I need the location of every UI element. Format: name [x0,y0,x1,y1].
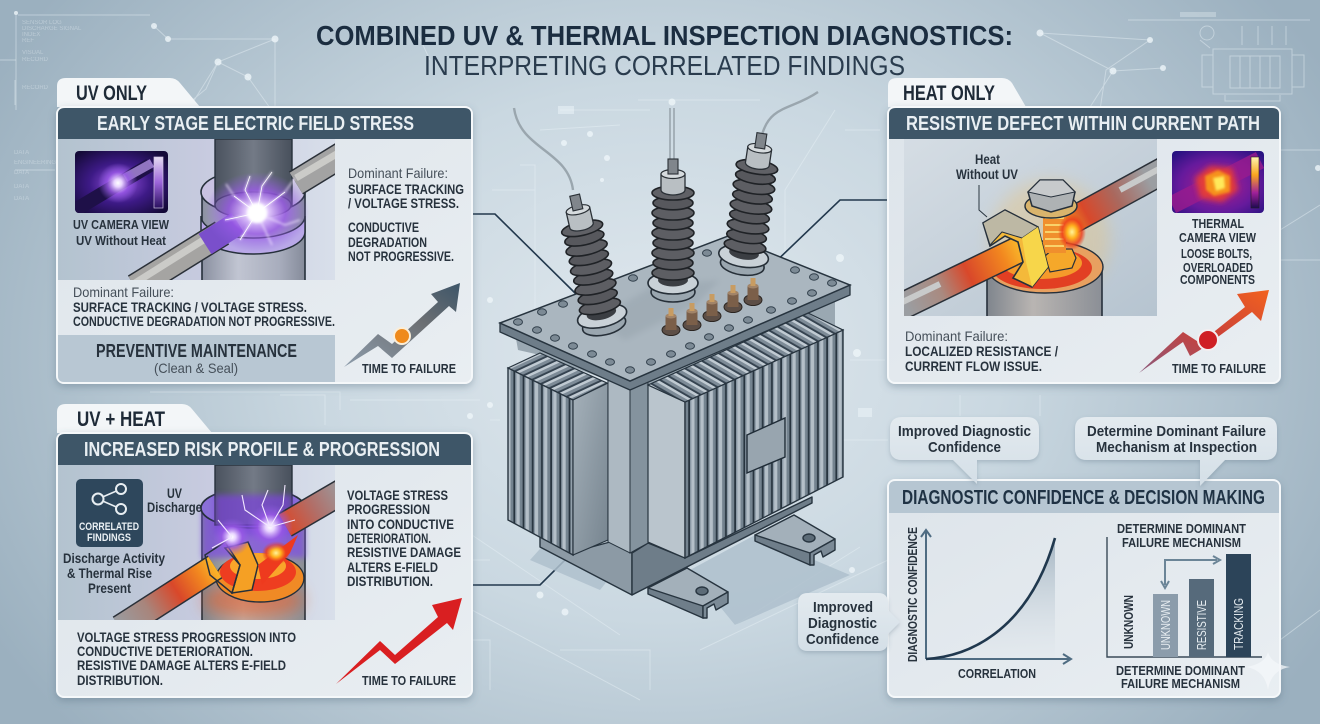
callout: determine dominant failure mechanism [1075,417,1277,486]
lower text: CURRENT FLOW ISSUE. [905,358,1042,374]
right text: PROGRESSION [347,501,430,517]
background circuit network: DATA [14,170,29,176]
nameplate [747,418,785,473]
callout: improved diagnostic confidence side [798,593,900,651]
inset captions [73,217,170,248]
bar chart: failure mechanism: RESISTIVE [1194,600,1209,650]
lower text [73,284,335,329]
callout: improved diagnostic confidence side: Improved [813,599,873,616]
left radiator top [508,353,607,400]
callout: improved diagnostic confidence side: Confidence [806,631,879,648]
illustration: bolted connection hotspot [904,139,1157,316]
badge: correlated findings: FINDINGS [87,532,131,544]
thermal captions: THERMAL [1192,216,1244,231]
leader: heat without UV [979,185,987,217]
maintenance text: PREVENTIVE MAINTENANCE [96,341,297,361]
header [889,481,1279,513]
mounting feet [648,515,835,618]
lower text: Dominant Failure: [73,284,174,300]
lower text [77,629,296,688]
bar chart: failure mechanism: UNKNOWN [1158,600,1173,650]
badge: correlated findings: CORRELATED [79,521,139,533]
lower text: SURFACE TRACKING / VOLTAGE STRESS. [73,299,307,315]
header [889,108,1279,139]
callout: improved diagnostic confidence top: Improved Diagnostic [898,423,1031,440]
maintenance text: (Clean & Seal) [154,360,238,376]
panel: diagnostic confidence [888,480,1290,697]
image captions: Discharge [147,499,202,515]
bar chart: failure mechanism: DETERMINE DOMINANT [1117,521,1246,536]
thermal captions: COMPONENTS [1180,272,1255,287]
tab [57,404,212,433]
header [58,434,471,465]
caption: heat without UV [956,151,1019,182]
heading text: UV + HEAT [77,408,165,431]
background circuit network: RECORD [22,85,49,91]
connector lines [472,200,888,585]
rear wall [515,298,835,395]
panel: UV only: EARLY STAGE ELECTRIC FIELD STRESS [97,113,414,135]
bushing right [716,130,787,279]
bushing left [550,190,631,340]
right radiator top [648,313,843,402]
header [58,108,471,139]
right text: DISTRIBUTION. [347,573,433,589]
panel: UV + heat: INCREASED RISK PROFILE & PROGRESSION [84,439,440,461]
bar chart: failure mechanism: FAILURE MECHANISM [1121,676,1240,691]
right text: SURFACE TRACKING [348,181,464,197]
right text: INTO CONDUCTIVE [347,516,454,532]
right radiator side [648,385,685,558]
right text: ALTERS E-FIELD [347,559,438,575]
title: INTERPRETING CORRELATED FINDINGS [424,50,905,81]
background circuit network: INDEX [22,32,40,38]
central corner [608,375,630,553]
background circuit network: SENSOR LOG [22,20,62,26]
panel body [888,107,1280,383]
bushing middle [648,159,698,302]
background circuit network: DATA [14,150,29,156]
bar chart: failure mechanism: UNKNOWN [1121,595,1136,649]
panel: UV only [57,78,472,383]
right text: DETERIORATION. [347,530,431,546]
line chart: confidence vs correlation: CORRELATION [958,666,1036,681]
arrow: time to failure: TIME TO FAILURE [362,361,456,376]
lid [500,285,850,390]
panel body [888,480,1280,697]
arrow: time to failure [336,598,462,688]
tab [888,78,1026,107]
floor shadow [530,535,850,625]
right text: / VOLTAGE STRESS. [348,195,459,211]
right text: NOT PROGRESSIVE. [348,248,454,264]
left radiator side [573,383,608,555]
title: COMBINED UV & THERMAL INSPECTION DIAGNOSTICS: [316,20,1013,51]
maintenance band [58,335,335,382]
panel body [57,107,472,383]
background circuit network: VISUAL [22,50,44,56]
right text: Dominant Failure: [348,165,448,181]
thermal captions: CAMERA VIEW [1179,230,1257,245]
bushing wires [514,92,818,190]
background circuit network: DATA [14,184,29,190]
image captions: & Thermal Rise [67,565,152,581]
panel: heat only [888,78,1280,383]
image captions [63,485,202,596]
right radiator fins [685,330,843,558]
right text: DEGRADATION [348,234,427,250]
image captions: UV [167,485,183,501]
thermal captions: LOOSE BOLTS, [1181,246,1252,261]
badge: correlated findings [76,479,143,547]
tab [57,78,200,107]
background circuit network: REF [22,38,34,44]
line chart: confidence vs correlation [905,527,1071,681]
lower text [905,328,1058,374]
illustration: UV discharge [58,139,345,287]
arrow: time to failure: TIME TO FAILURE [1172,361,1266,376]
heading text: UV ONLY [76,82,147,105]
callout: improved diagnostic confidence top [890,417,1039,484]
background circuit network: DATA [14,196,29,202]
arrow: time to failure: TIME TO FAILURE [362,673,456,688]
callout: determine dominant failure mechanism: Mechanism at Inspection [1096,439,1257,456]
low-voltage terminals [662,278,762,336]
arrow: time to failure [1139,290,1269,376]
background circuit network: RECORD [22,57,49,63]
callout: determine dominant failure mechanism: Determine Dominant Failure [1087,423,1266,440]
image captions: Present [88,580,131,596]
callout: improved diagnostic confidence side: Diagnostic [808,615,877,632]
lower text: CONDUCTIVE DEGRADATION NOT PROGRESSIVE. [73,313,335,329]
transformer illustration [500,92,850,625]
lid bolts [514,250,836,373]
inset captions: UV Without Heat [76,233,167,248]
arrow: time to failure [344,283,460,376]
bar chart: failure mechanism: FAILURE MECHANISM [1122,535,1241,550]
caption: heat without UV: Without UV [956,166,1019,182]
bar chart: failure mechanism: DETERMINE DOMINANT [1116,663,1245,678]
inset: UV camera view [75,151,168,213]
right text: RESISTIVE DAMAGE [347,544,461,560]
background circuit network: ENGINEERING [14,160,56,166]
lower text: DISTRIBUTION. [77,672,163,688]
right text [347,487,461,589]
callout: improved diagnostic confidence top: Confidence [928,439,1001,456]
inset: thermal camera view [1172,151,1264,213]
lower text: RESISTIVE DAMAGE ALTERS E-FIELD [77,657,286,673]
lower text: Dominant Failure: [905,328,1008,344]
bar chart: failure mechanism [1107,521,1262,691]
right text: CONDUCTIVE [348,219,419,235]
lower text: CONDUCTIVE DETERIORATION. [77,643,253,659]
inset captions: UV CAMERA VIEW [73,217,170,232]
right text [348,165,464,264]
panel body [57,433,472,697]
line chart: confidence vs correlation: DIAGNOSTIC CONFIDENCE [905,527,920,662]
lower text: LOCALIZED RESISTANCE / [905,343,1058,359]
thermal captions: OVERLOADED [1183,260,1253,275]
image captions: Discharge Activity [63,550,165,566]
bar chart: failure mechanism: TRACKING [1231,598,1246,650]
lower text: VOLTAGE STRESS PROGRESSION INTO [77,629,296,645]
background circuit network: DISCHARGE SIGNAL [22,26,82,32]
thermal captions [1179,216,1257,287]
right text: VOLTAGE STRESS [347,487,448,503]
panel: UV + heat [57,404,472,697]
caption: heat without UV: Heat [975,151,1000,167]
illustration: combined discharge and heat [58,465,345,628]
maintenance text [96,341,297,376]
left radiator fins [508,368,573,555]
icon: sparkle [1246,652,1290,690]
tank base [540,497,812,595]
title [316,20,1013,81]
heading text: HEAT ONLY [903,82,995,105]
